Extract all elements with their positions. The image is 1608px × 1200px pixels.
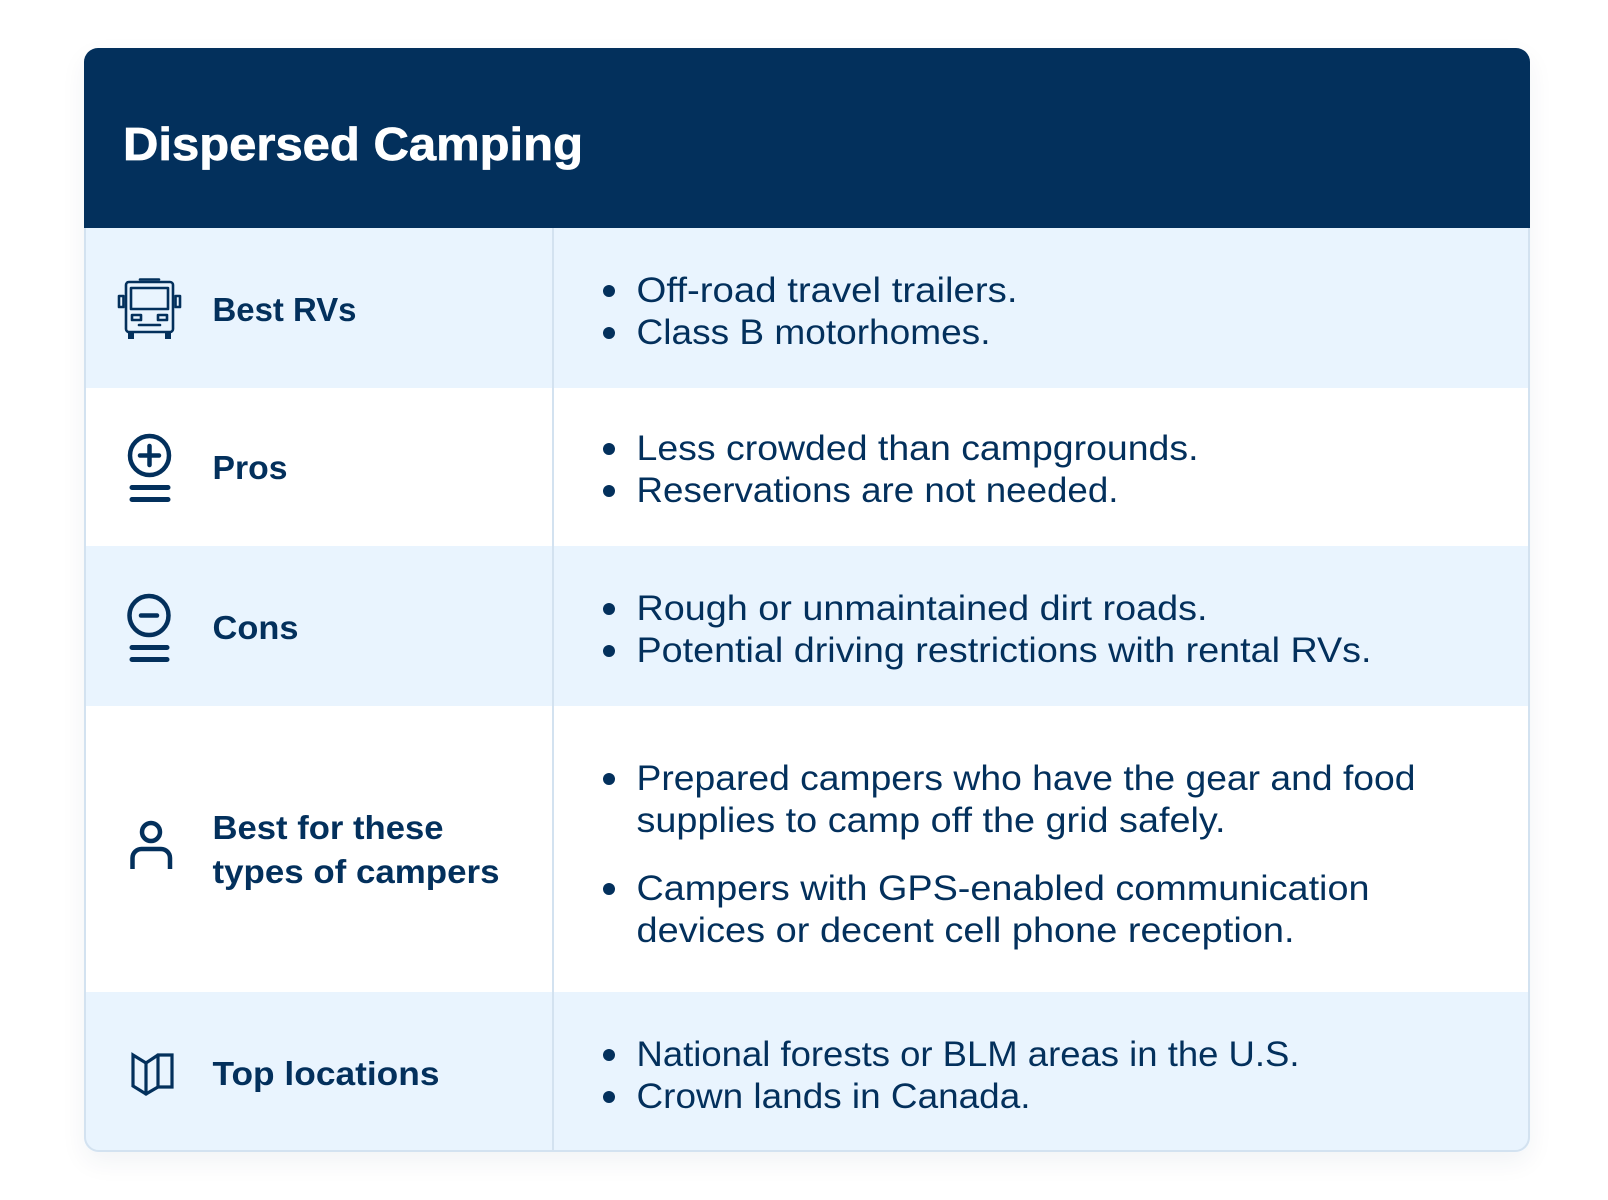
list: cons — [603, 589, 1372, 670]
list: camper types: supplies to camp off the grid safely. — [636, 801, 1226, 840]
row: pros — [130, 429, 1198, 510]
list: best RVs — [603, 271, 1018, 352]
list: camper types: Campers with GPS-enabled communication — [636, 869, 1370, 908]
list: pros: Reservations are not needed. — [636, 471, 1118, 510]
row: cons — [130, 589, 1372, 670]
row: best RVs — [119, 271, 1018, 352]
list: camper types: Prepared campers who have the gear and food — [636, 759, 1416, 798]
label: best RVs: Best RVs — [212, 291, 356, 328]
label: top locations: Top locations — [212, 1055, 440, 1092]
row: top locations — [133, 1035, 1300, 1116]
list: cons: Potential driving restrictions with rental RVs. — [636, 631, 1372, 670]
icon: minus in circle — [130, 596, 168, 660]
list: pros: Less crowded than campgrounds. — [636, 429, 1198, 468]
list: best RVs: Off-road travel trailers. — [636, 271, 1018, 310]
list: top locations: Crown lands in Canada. — [636, 1077, 1030, 1116]
row: best for these types of campers — [132, 759, 1416, 950]
label: best for these types of campers: Best for these — [212, 809, 444, 846]
label: pros: Pros — [212, 449, 288, 486]
list: camper types — [603, 759, 1416, 950]
label: best for these types of campers: types of campers — [212, 853, 500, 890]
list: pros — [603, 429, 1198, 510]
list: best RVs: Class B motorhomes. — [636, 313, 990, 352]
icon: RV bus — [119, 280, 180, 339]
icon: folded map — [133, 1055, 172, 1094]
list: top locations: National forests or BLM areas in the U.S. — [636, 1035, 1300, 1074]
header title: Dispersed Camping — [123, 118, 583, 170]
icon: person — [132, 823, 170, 869]
icon: plus in circle — [130, 436, 169, 500]
label: cons: Cons — [212, 609, 298, 646]
list: top locations — [603, 1035, 1300, 1116]
label: best for these types of campers — [212, 809, 500, 890]
list: camper types: devices or decent cell phone reception. — [636, 911, 1294, 950]
list: cons: Rough or unmaintained dirt roads. — [636, 589, 1208, 628]
